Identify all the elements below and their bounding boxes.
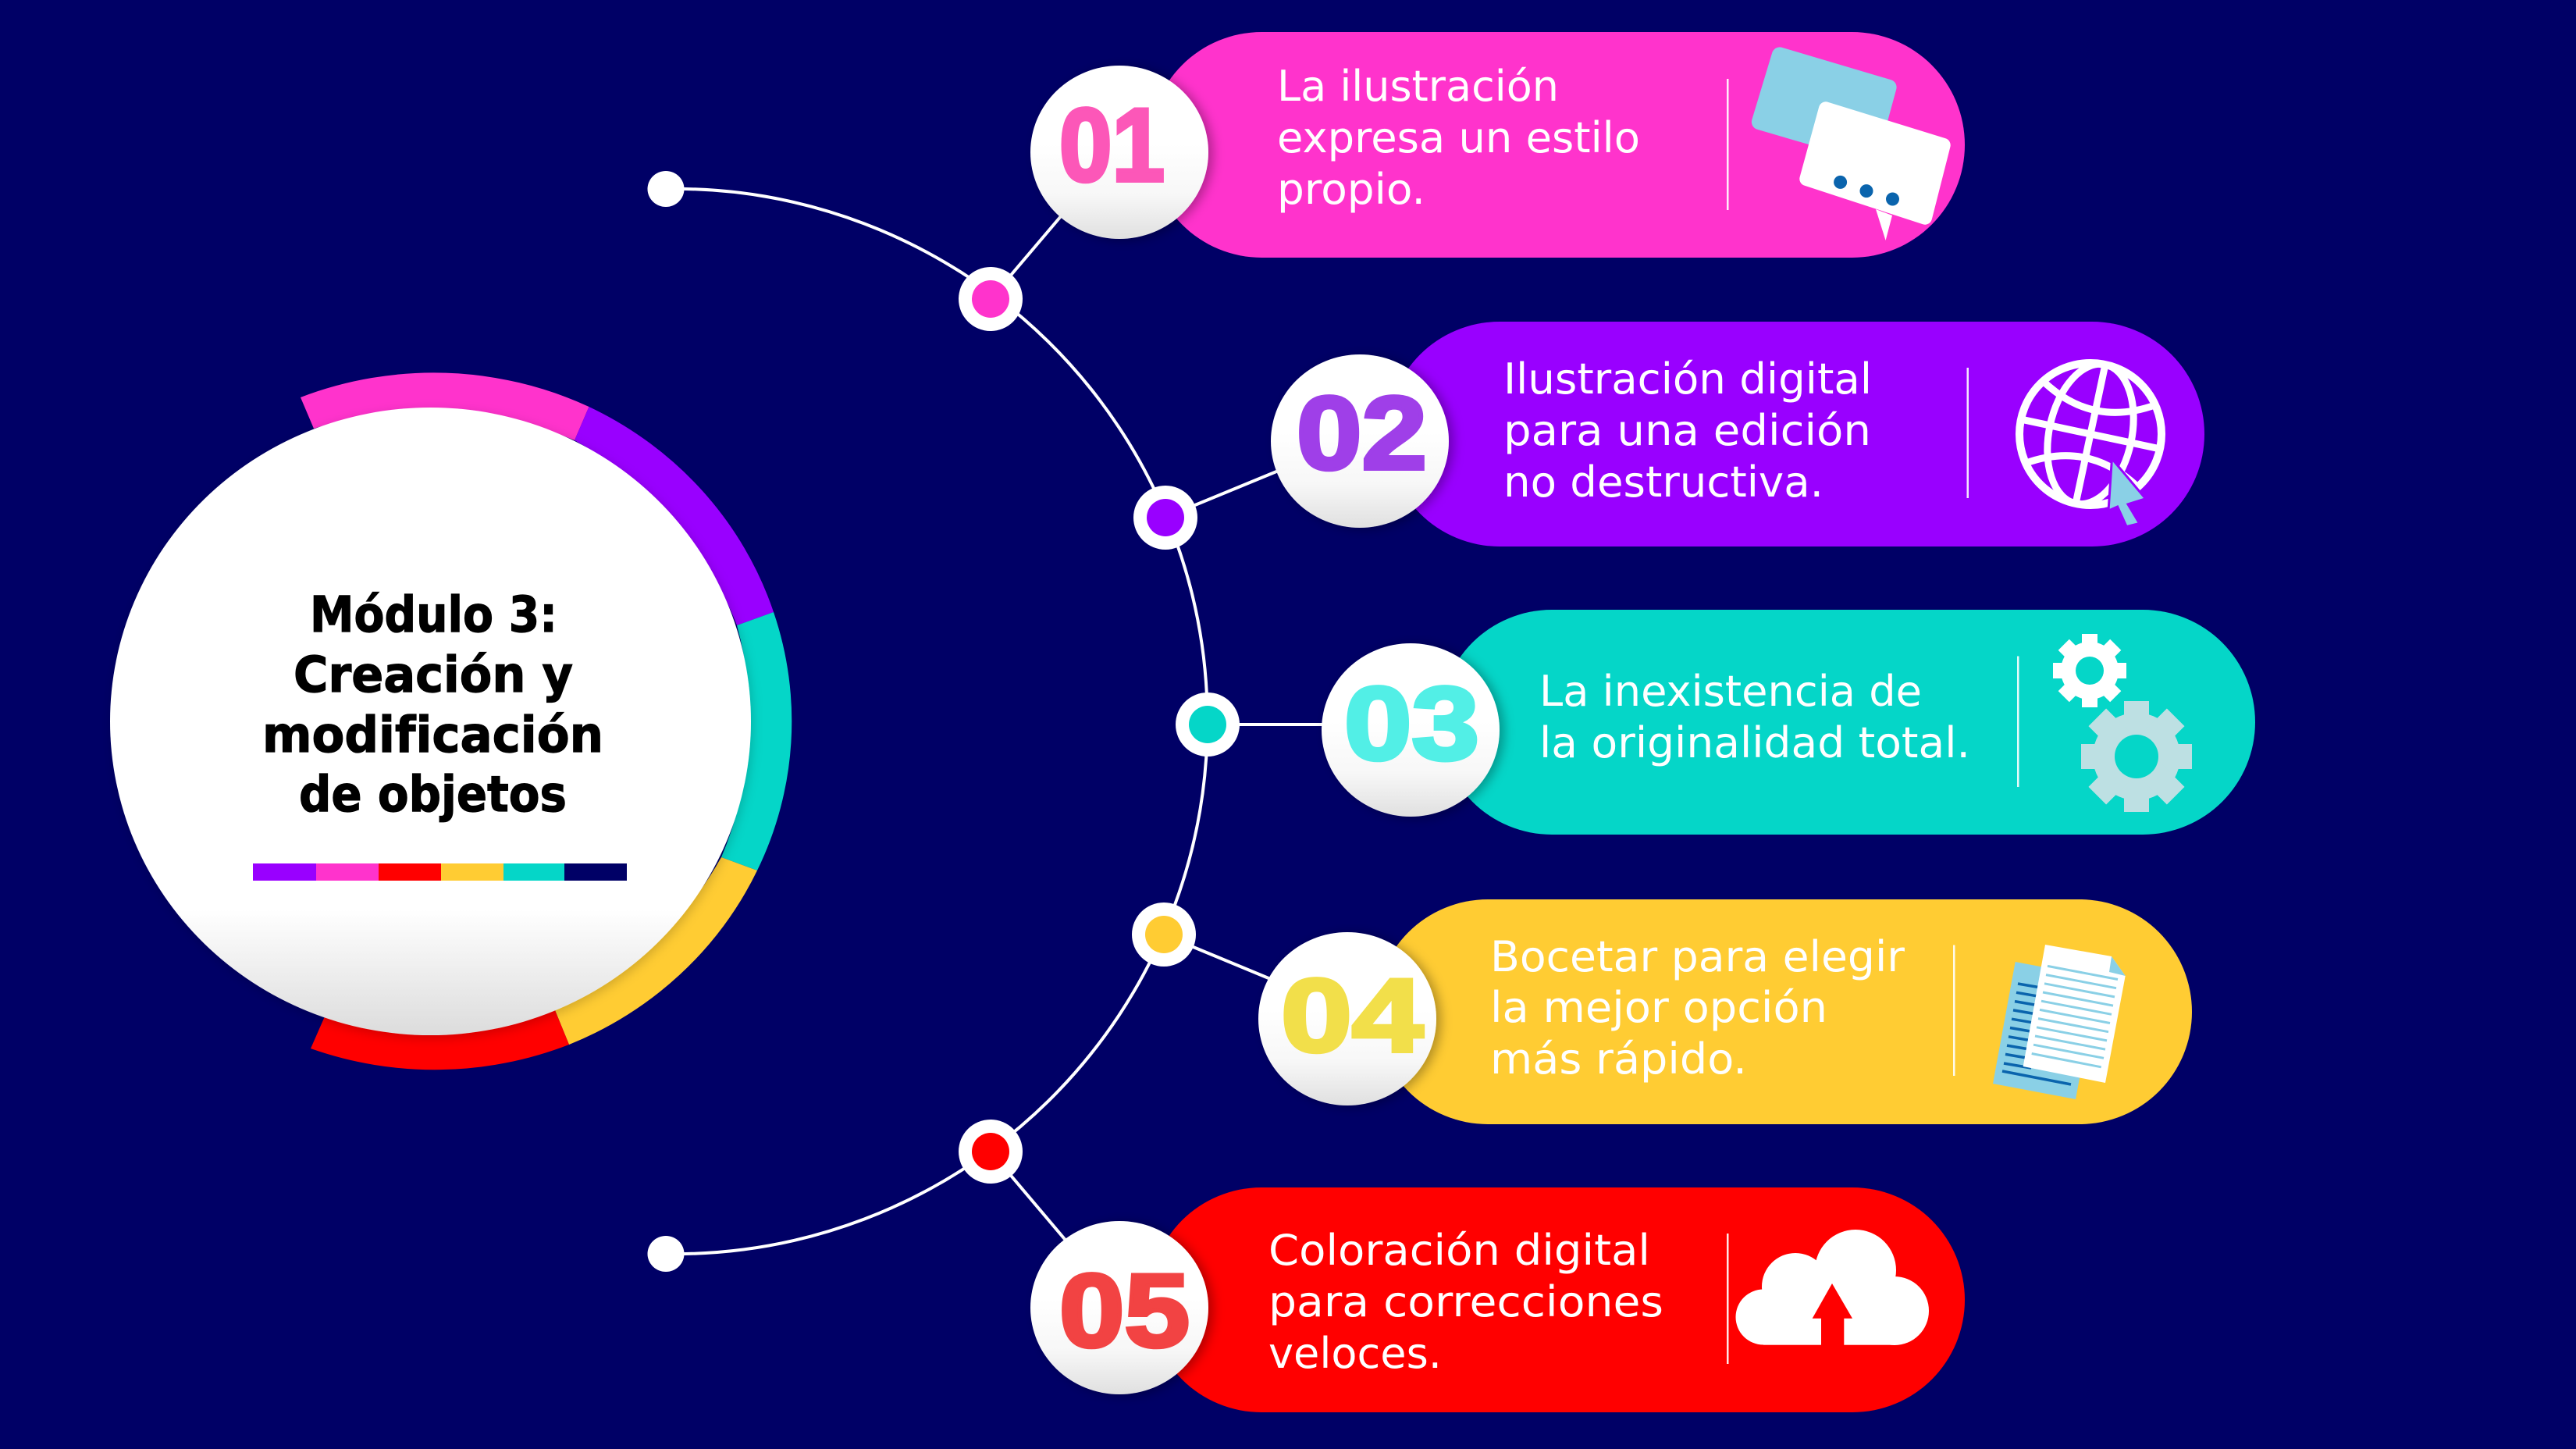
connector 04 bbox=[1163, 935, 1272, 980]
text 02: Ilustración digital bbox=[1503, 354, 1872, 404]
text 05 bbox=[1268, 1226, 1663, 1378]
white disc bbox=[110, 408, 751, 1035]
text 05: para correcciones bbox=[1268, 1277, 1663, 1326]
divider 01 bbox=[1727, 79, 1728, 210]
text 01: expresa un estilo bbox=[1277, 113, 1640, 162]
text 03 bbox=[1539, 667, 1970, 767]
central module circle bbox=[110, 372, 792, 1070]
title: modificación bbox=[262, 707, 603, 764]
divider 03 bbox=[2017, 656, 2019, 787]
icon: chat bubbles bbox=[1759, 55, 1944, 240]
text 03: la originalidad total. bbox=[1539, 718, 1970, 767]
coloured ring bbox=[301, 372, 792, 1070]
text 01: propio. bbox=[1277, 165, 1425, 214]
text 03: La inexistencia de bbox=[1539, 667, 1922, 716]
node 01 bbox=[959, 267, 1023, 331]
pill 01 bbox=[1149, 32, 1965, 258]
number 05: 05 bbox=[1059, 1254, 1190, 1369]
divider 02 bbox=[1967, 368, 1969, 498]
number 02 bbox=[1271, 354, 1449, 528]
title bbox=[262, 586, 603, 823]
icon: globe with cursor bbox=[2006, 350, 2175, 525]
number 04: 04 bbox=[1281, 959, 1423, 1074]
divider 04 bbox=[1953, 945, 1955, 1076]
pill 05 bbox=[1149, 1187, 1965, 1412]
item 05 bbox=[959, 1120, 1965, 1412]
item 01 bbox=[959, 32, 1965, 331]
icon: cloud upload bbox=[1736, 1230, 1929, 1345]
number 01: 01 bbox=[1059, 87, 1165, 203]
number 05 bbox=[1030, 1221, 1208, 1394]
number 03: 03 bbox=[1344, 667, 1479, 782]
text 05: Coloración digital bbox=[1268, 1226, 1650, 1275]
item 02 bbox=[1133, 322, 2204, 550]
connector 03 bbox=[1208, 723, 1327, 726]
number 02: 02 bbox=[1297, 376, 1427, 492]
node 05 bbox=[959, 1120, 1023, 1184]
text 02: no destructiva. bbox=[1503, 457, 1823, 507]
title: Módulo 3: bbox=[310, 586, 557, 643]
small gear bbox=[2053, 634, 2126, 707]
text 02: para una edición bbox=[1503, 406, 1871, 455]
node 02 bbox=[1133, 486, 1197, 550]
title: Creación y bbox=[294, 646, 573, 703]
text 02 bbox=[1503, 354, 1872, 507]
text 04: más rápido. bbox=[1490, 1034, 1747, 1084]
icon: documents bbox=[1993, 945, 2126, 1099]
connector 05 bbox=[991, 1152, 1068, 1243]
arc end dot bbox=[648, 1236, 684, 1272]
text 01 bbox=[1277, 62, 1640, 214]
item 03 bbox=[1176, 610, 2255, 835]
icon: gears bbox=[2053, 634, 2192, 812]
pill 04 bbox=[1375, 899, 2192, 1124]
node 04 bbox=[1132, 903, 1196, 967]
connector 01 bbox=[991, 211, 1066, 299]
text 04 bbox=[1490, 932, 1905, 1084]
large gear bbox=[2081, 701, 2192, 812]
number 04 bbox=[1258, 932, 1436, 1105]
pill 03 bbox=[1439, 610, 2255, 835]
text 05: veloces. bbox=[1268, 1329, 1442, 1378]
number 01 bbox=[1030, 66, 1208, 239]
text 04: Bocetar para elegir bbox=[1490, 932, 1905, 981]
text 04: la mejor opción bbox=[1490, 983, 1827, 1032]
divider 05 bbox=[1727, 1234, 1728, 1364]
colour bar bbox=[253, 863, 627, 881]
item 04 bbox=[1132, 899, 2192, 1124]
timeline arc bbox=[666, 189, 1208, 1254]
connector 02 bbox=[1165, 470, 1280, 518]
number 03 bbox=[1322, 643, 1500, 817]
arc start dot bbox=[648, 171, 684, 207]
pill 02 bbox=[1387, 322, 2204, 546]
text 01: La ilustración bbox=[1277, 62, 1559, 111]
title: de objetos bbox=[299, 766, 567, 823]
node 03 bbox=[1176, 692, 1240, 757]
